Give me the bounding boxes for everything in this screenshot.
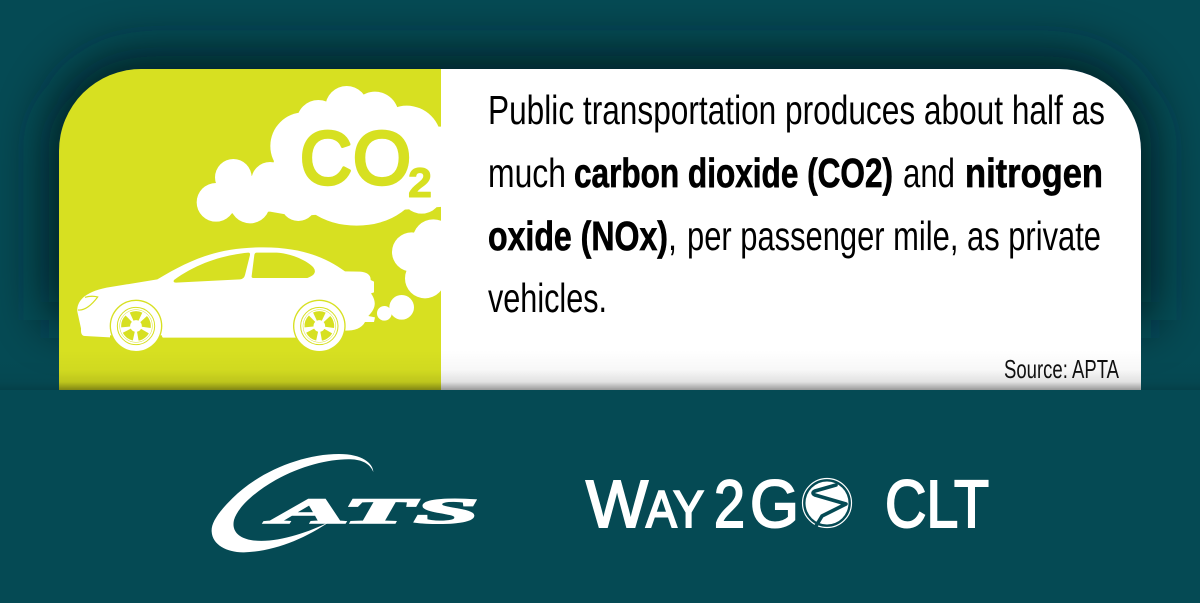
card shadow bbox=[0, 56, 1200, 390]
icon text: CO2: O bbox=[353, 116, 411, 200]
body text: , bbox=[668, 213, 677, 259]
icon text: CO2 bbox=[302, 130, 431, 198]
logo: Way2Go CLT: AY bbox=[646, 481, 704, 539]
illustration: exhaust clouds and car bbox=[77, 86, 467, 352]
icon: small exhaust puffs bbox=[377, 295, 414, 321]
logo: Way2Go CLT: G bbox=[750, 467, 799, 542]
icon: second cloud bbox=[392, 219, 441, 298]
icon: front wheel bbox=[110, 300, 162, 352]
panel: info card bbox=[59, 69, 1141, 390]
body text: oxide (NOx) bbox=[488, 213, 668, 259]
logo: Way2Go CLT: W bbox=[586, 467, 649, 542]
icon: car bbox=[77, 247, 375, 352]
body text: and bbox=[903, 150, 955, 196]
body text: carbon dioxide (CO2) bbox=[574, 150, 893, 196]
source note: Source: APTA bbox=[1004, 354, 1119, 384]
icon text: CO2: C bbox=[300, 116, 352, 200]
body text: vehicles. bbox=[488, 275, 607, 321]
logo: CATS: ATS bbox=[265, 491, 479, 531]
body text: nitrogen bbox=[965, 150, 1103, 196]
icon: rear wheel bbox=[293, 300, 346, 352]
icon text: CO2: 2 bbox=[408, 159, 432, 206]
body text bbox=[488, 87, 1105, 321]
card bottom shading bbox=[59, 370, 1141, 390]
logo: Way2Go CLT bbox=[586, 467, 989, 542]
logo: Way2Go CLT: 2 bbox=[714, 467, 745, 542]
icon: large CO2 cloud bbox=[197, 86, 443, 226]
body text: much bbox=[488, 150, 566, 196]
icon: Way2Go road arrow bbox=[802, 478, 852, 528]
logo: Way2Go CLT: CLT bbox=[885, 467, 989, 542]
logo: CATS bbox=[212, 454, 479, 552]
